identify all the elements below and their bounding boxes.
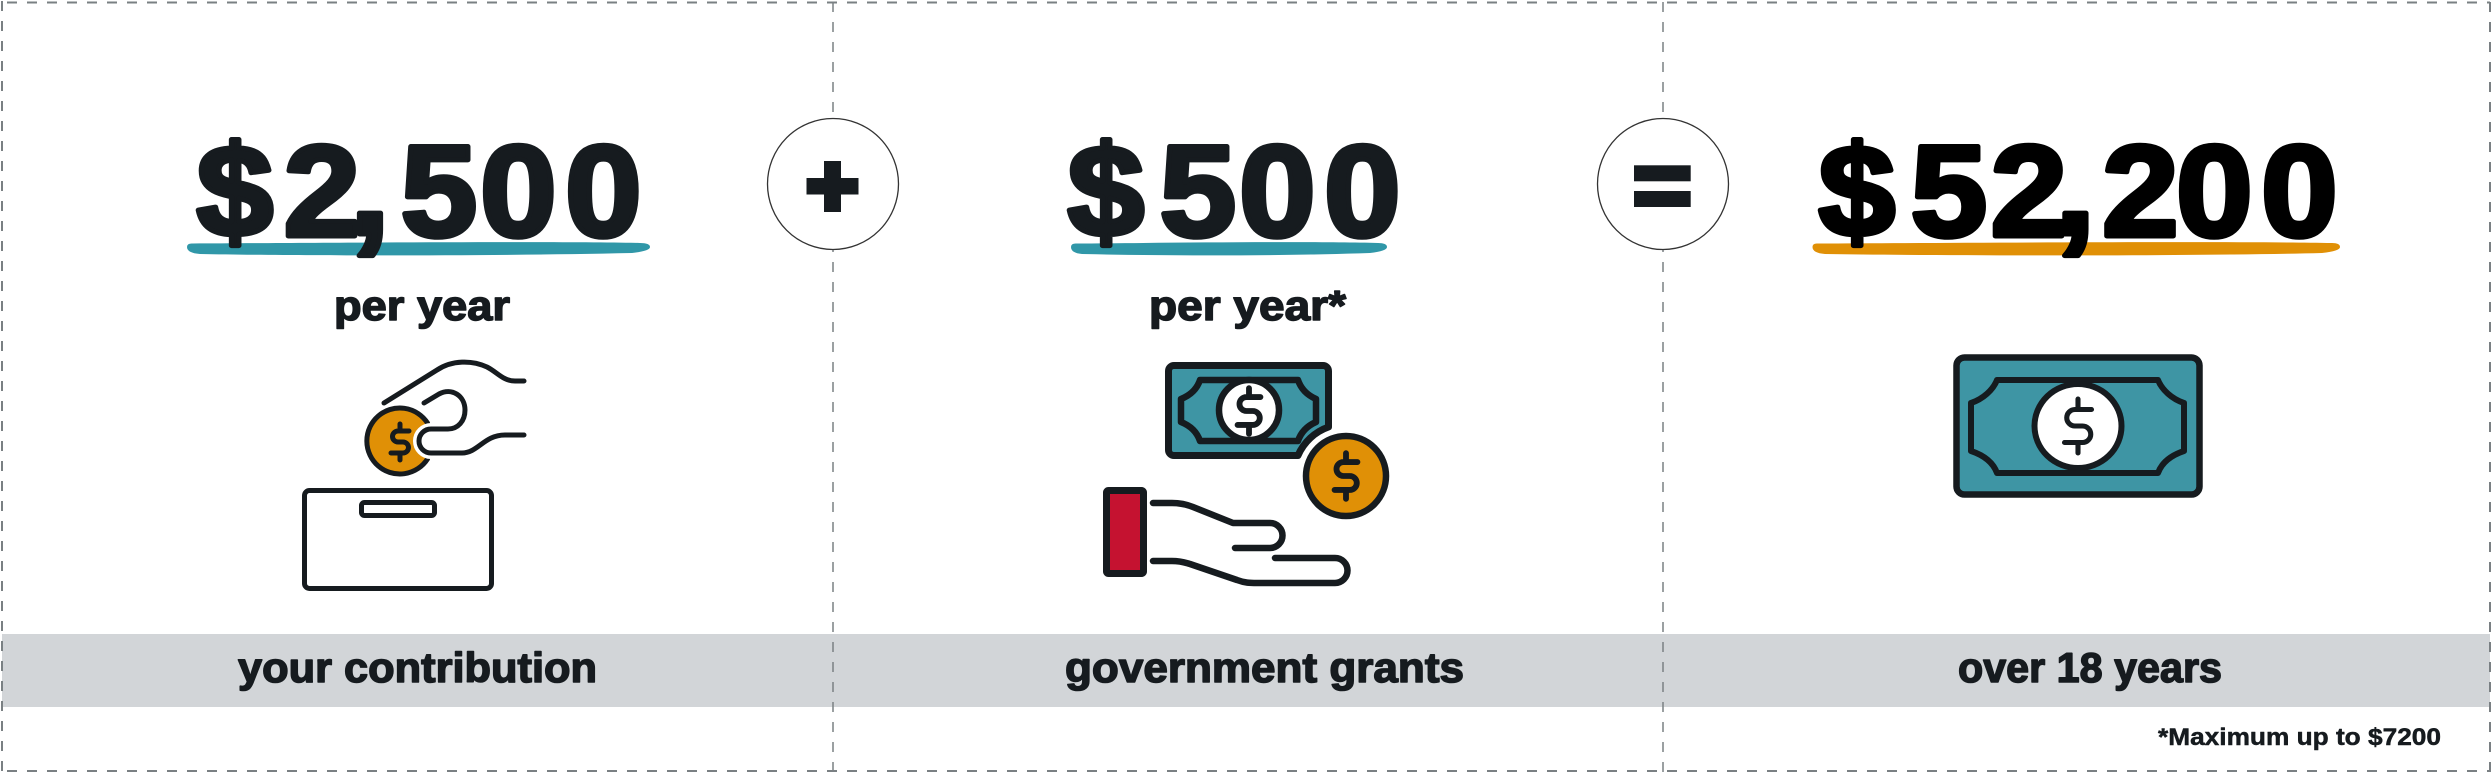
icon: banknote, coin and open hand — [1106, 366, 1386, 583]
label band: your contribution — [2, 634, 833, 707]
amount: $2,500: 500 — [401, 120, 642, 264]
text: per year with asterisk: per year* — [1149, 282, 1347, 329]
amount: $2,500: $2 — [197, 120, 360, 264]
label band: your contribution: your contribution — [238, 644, 597, 691]
panel: your contribution — [2, 107, 833, 707]
amount: $2,500: , — [349, 107, 390, 264]
underline: teal — [1071, 242, 1387, 255]
operator: plus — [768, 118, 898, 250]
label band: government grants — [833, 634, 1664, 707]
operator: equals — [1598, 118, 1728, 250]
amount: $52,200: , — [2055, 107, 2096, 264]
text: per year: per year — [334, 282, 510, 329]
label band: over 18 years — [1664, 634, 2490, 707]
amount: $52,200: $52 — [1819, 120, 2067, 264]
amount: $52,200: 200 — [2102, 120, 2338, 264]
label band: over 18 years: over 18 years — [1958, 644, 2222, 691]
footnote: *Maximum up to $7200 — [2158, 724, 2441, 751]
label band: government grants: government grants — [1065, 644, 1464, 691]
underline: orange — [1812, 242, 2340, 255]
panel: over 18 years — [1664, 107, 2490, 751]
icon: banknote — [1956, 358, 2200, 494]
amount: $500: $500 — [1068, 120, 1401, 264]
icon: hand dropping coin into box — [304, 362, 524, 588]
panel: government grants — [833, 120, 1664, 707]
underline: teal — [187, 242, 650, 255]
